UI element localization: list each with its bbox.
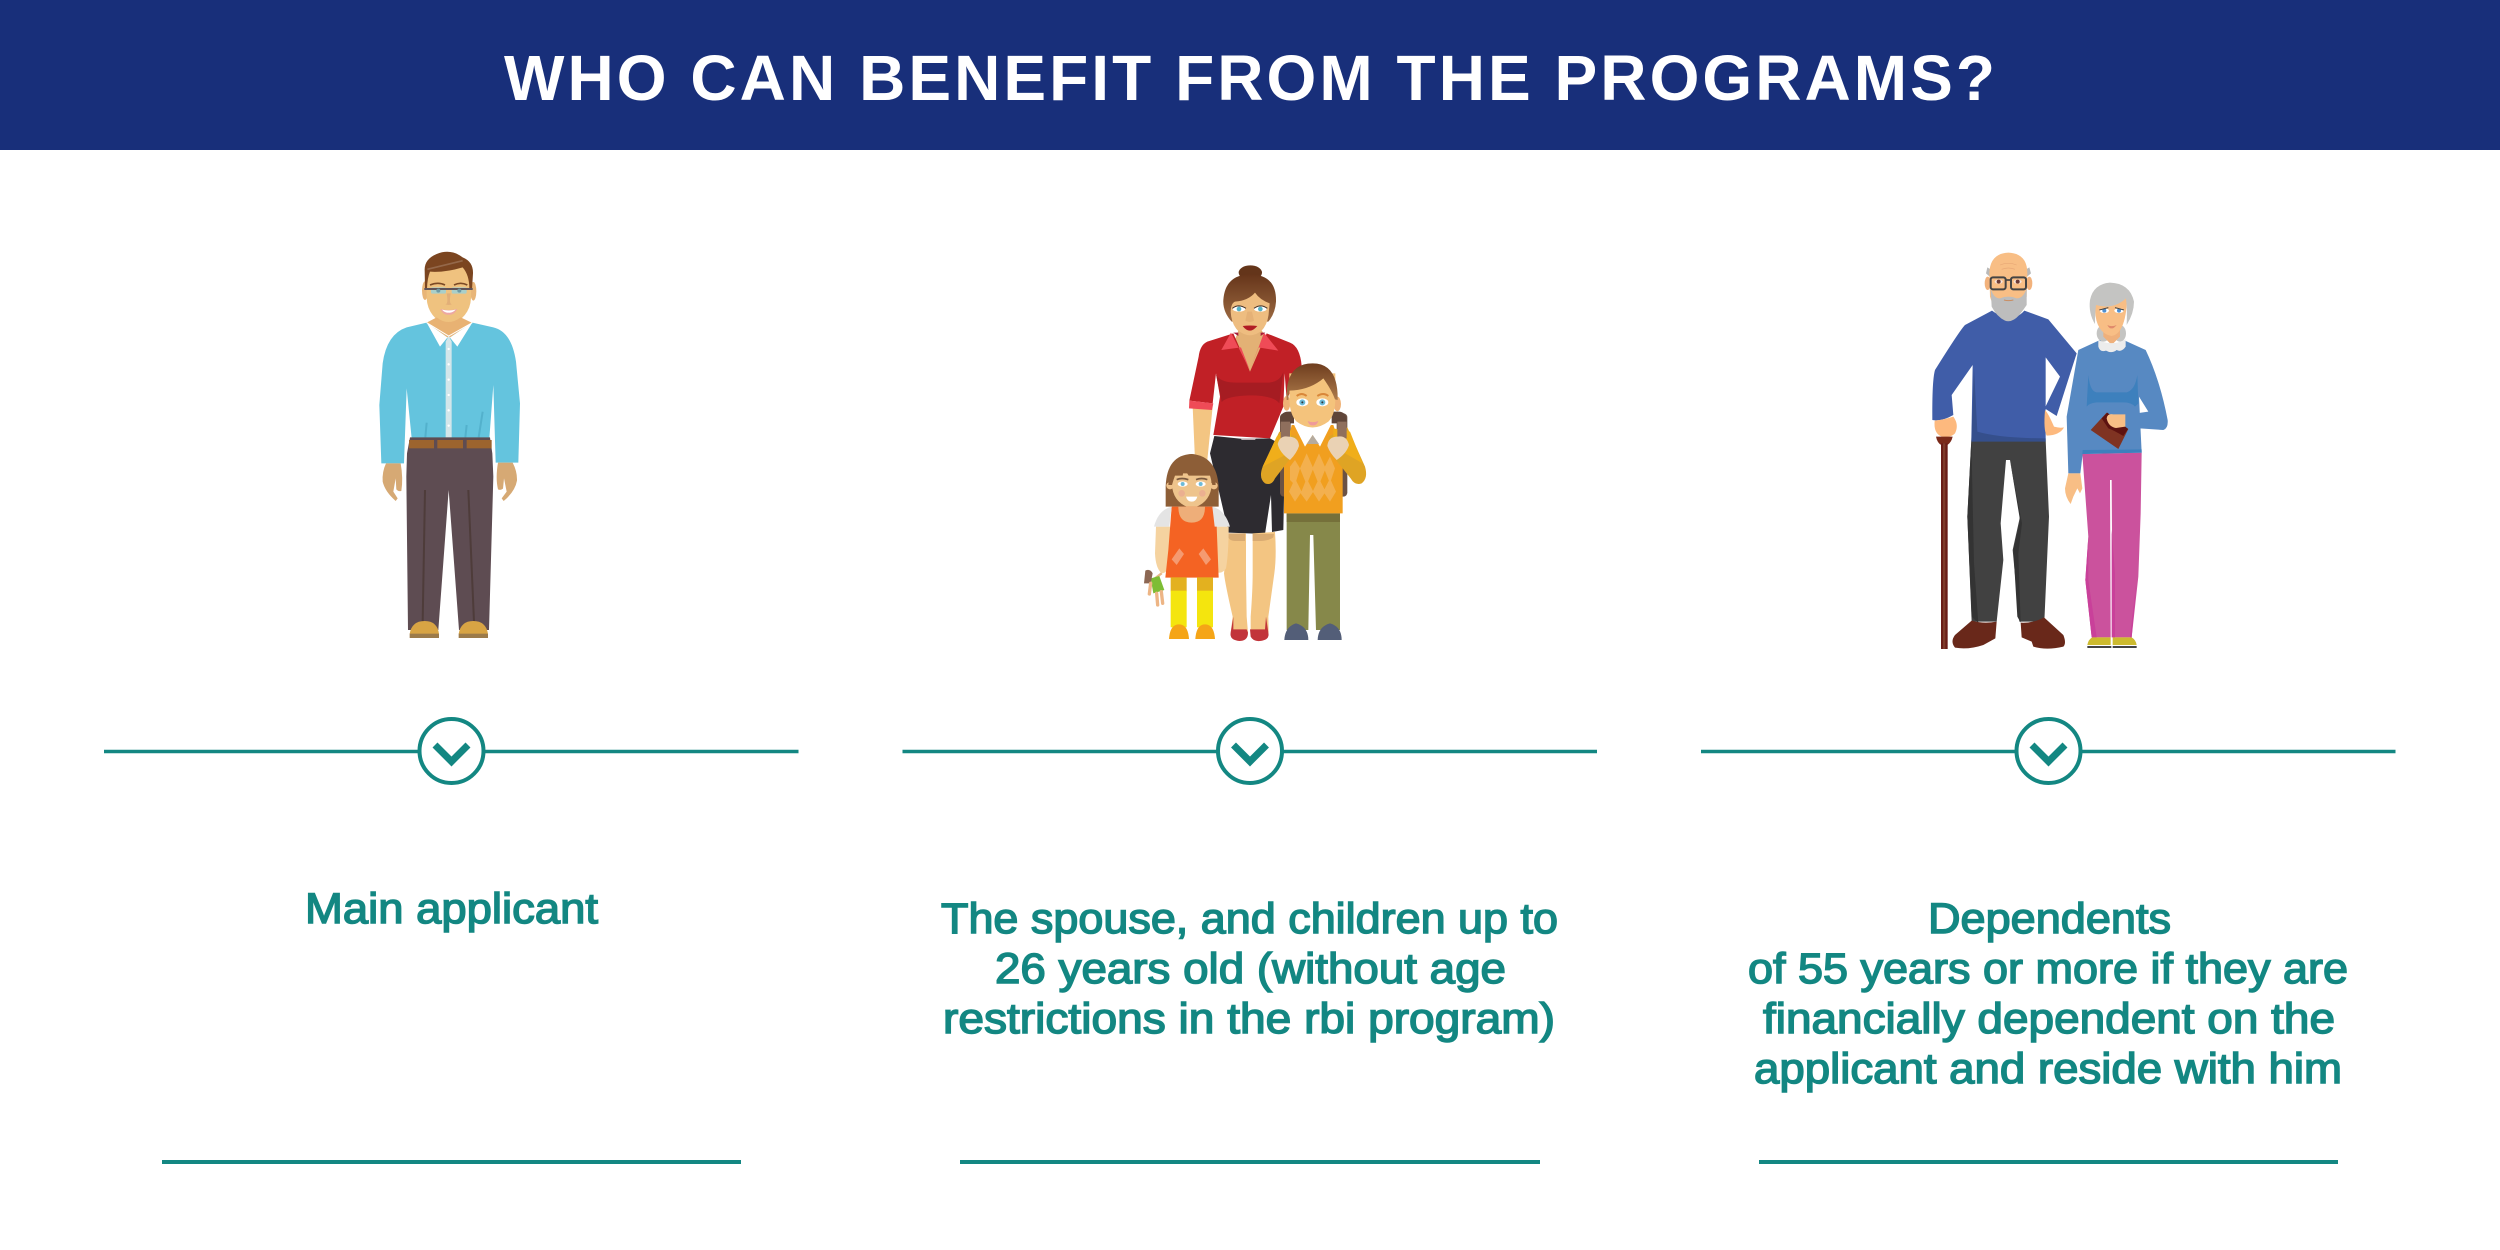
caption: spouse and children	[941, 895, 1558, 1043]
caption: spouse and children: 26 years old (without age	[995, 945, 1506, 993]
grandmother	[2065, 283, 2168, 648]
caption: main applicant: Main applicant	[305, 885, 598, 933]
illustration: mother, girl and boy	[1144, 265, 1366, 641]
panel: main applicant	[104, 252, 798, 1164]
divider with chevron circle	[1701, 719, 2396, 783]
panel: dependents	[1701, 253, 2396, 1164]
boy	[1261, 363, 1366, 640]
illustration: man with glasses	[379, 252, 520, 638]
bottom rule	[162, 1160, 741, 1164]
caption: dependents: Dependents	[1928, 895, 2171, 943]
caption: dependents	[1748, 895, 2348, 1093]
caption: spouse and children: restrictions in the rbi program)	[943, 995, 1555, 1043]
header banner	[0, 0, 2500, 150]
bottom rule	[960, 1160, 1540, 1164]
girl with doll	[1144, 454, 1230, 639]
caption: dependents: of 55 years or more if they are	[1748, 945, 2348, 993]
grandfather	[1932, 253, 2077, 649]
illustration: elderly couple	[1932, 253, 2168, 649]
mother	[1189, 265, 1302, 641]
bottom rule	[1759, 1160, 2338, 1164]
caption: spouse and children: The spouse, and children up to	[941, 895, 1558, 943]
divider with chevron circle	[104, 719, 798, 783]
title: WHO CAN BENEFIT FROM THE PROGRAMS?	[504, 42, 1995, 114]
panel: spouse and children	[902, 265, 1597, 1164]
divider with chevron circle	[902, 719, 1597, 783]
caption: dependents: financially dependent on the	[1763, 995, 2335, 1043]
caption: dependents: applicant and reside with him	[1754, 1045, 2342, 1093]
